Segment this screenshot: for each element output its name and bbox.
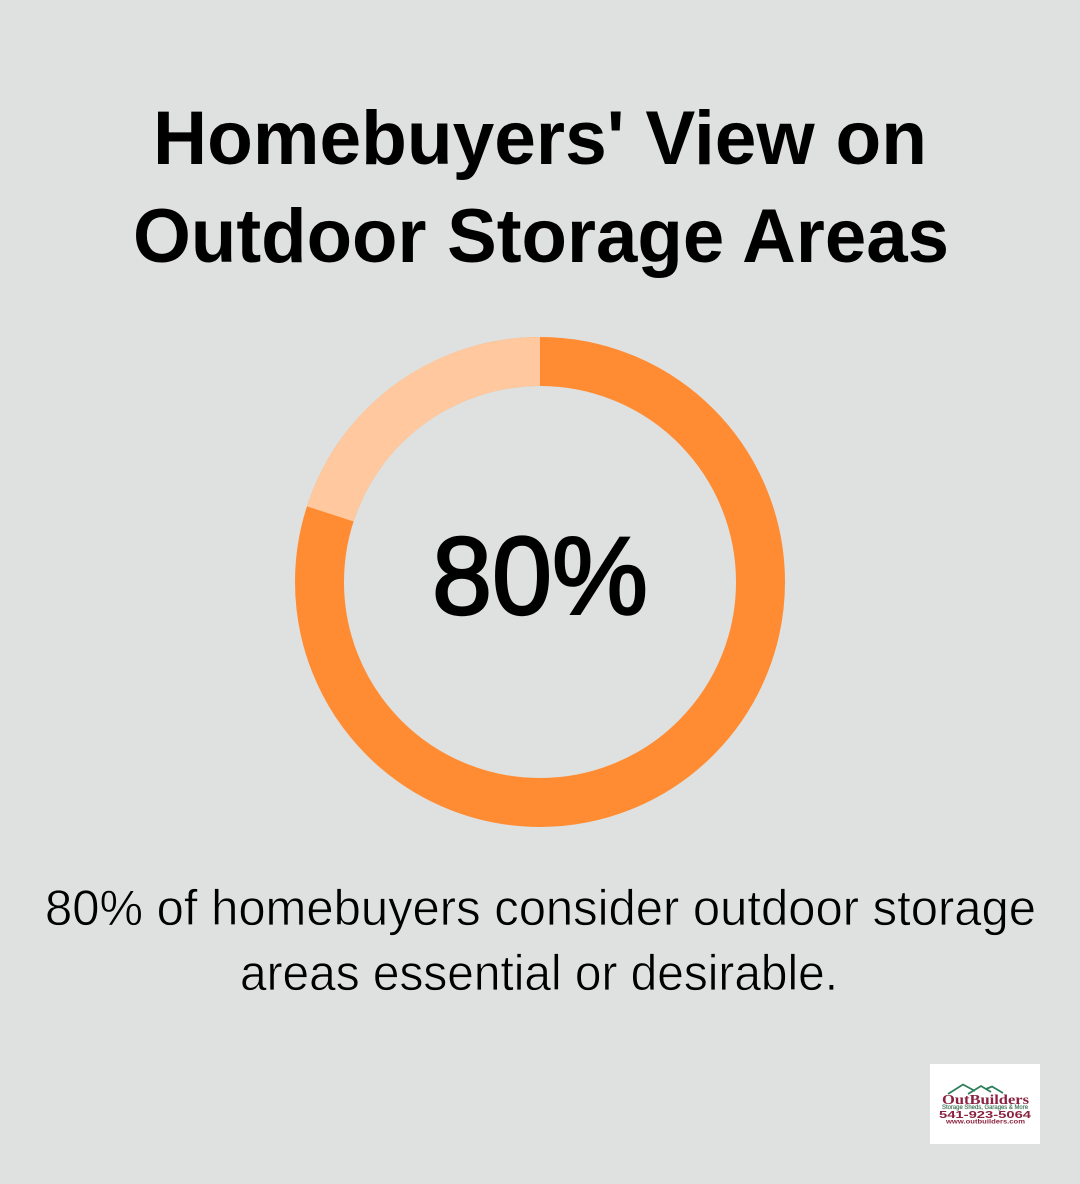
description: areas essential or desirable. (240, 945, 838, 1001)
logo: OutBuilders: www.outbuilders.com (945, 1118, 1025, 1126)
center value: 80% (432, 515, 648, 638)
icon: roofline (948, 1084, 1003, 1094)
title: Outdoor Storage Areas (133, 194, 949, 279)
description (45, 880, 1036, 1001)
title (133, 96, 949, 279)
donut chart: 80% (320, 362, 760, 802)
logo: OutBuilders: OutBuilders (942, 1093, 1030, 1108)
title: Homebuyers' View on (153, 96, 927, 181)
logo: OutBuilders (930, 1064, 1040, 1144)
logo: OutBuilders: 541-923-5064 (939, 1109, 1031, 1121)
logo: OutBuilders: Storage Sheds, Garages & More (942, 1105, 1029, 1111)
description: 80% of homebuyers consider outdoor storage (45, 880, 1036, 936)
